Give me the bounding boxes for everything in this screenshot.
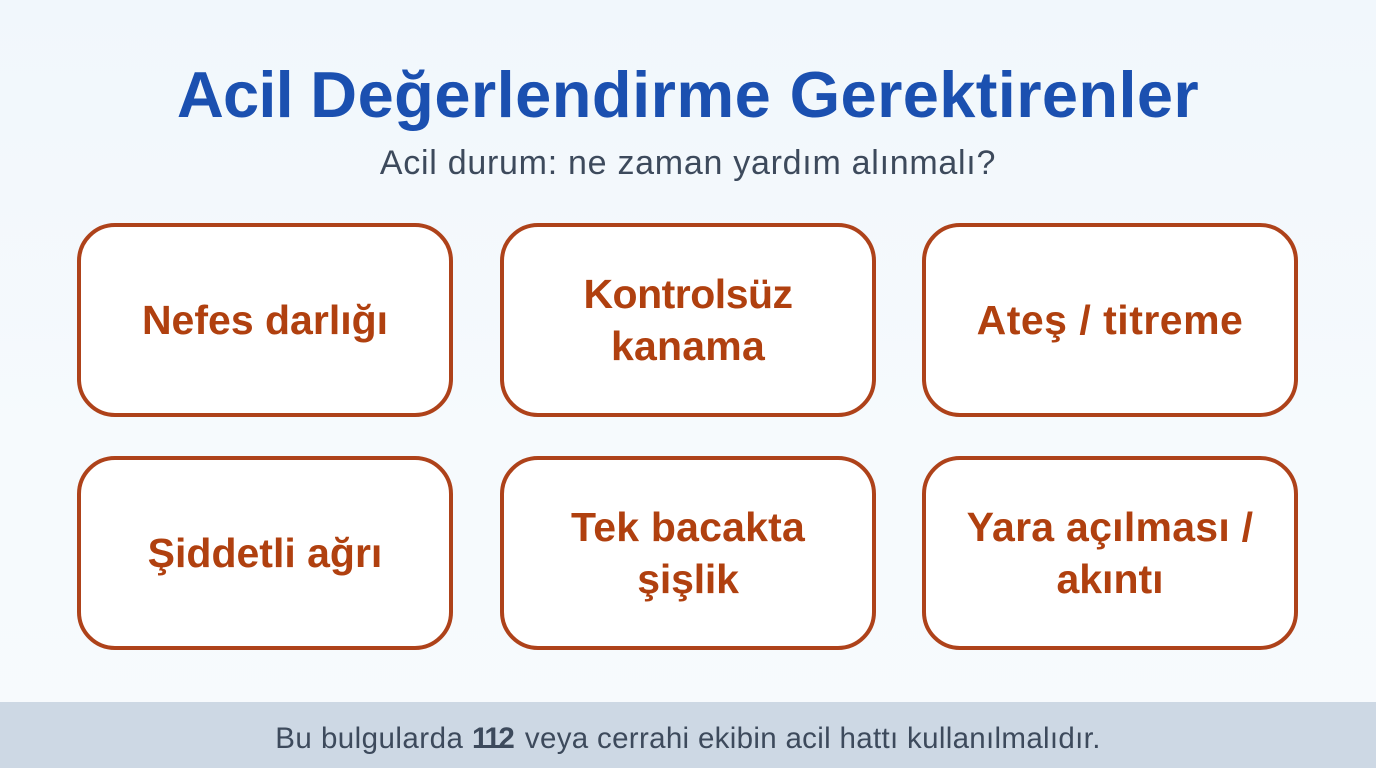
card: Kontrolsüz kanama: kanama xyxy=(611,323,765,369)
title: Acil Değerlendirme Gerektirenler xyxy=(177,58,1199,130)
card: Yara açılması / akıntı: akıntı xyxy=(1056,556,1164,602)
card: Şiddetli ağrı: Şiddetli ağrı xyxy=(148,530,382,576)
card: Kontrolsüz kanama xyxy=(500,223,876,417)
footer note xyxy=(0,702,1376,768)
card: Nefes darlığı xyxy=(77,223,453,417)
card: Nefes darlığı: Nefes darlığı xyxy=(142,297,388,343)
card: Yara açılması / akıntı xyxy=(922,456,1298,650)
card: Ateş / titreme: Ateş / titreme xyxy=(977,297,1243,343)
card: Tek bacakta şişlik xyxy=(500,456,876,650)
footer note: Bu bulgularda 112 veya cerrahi ekibin acil hattı kullanılmalıdır. xyxy=(275,722,1101,755)
card: Yara açılması / akıntı: Yara açılması / xyxy=(967,504,1253,550)
subtitle: Acil durum: ne zaman yardım alınmalı? xyxy=(380,144,996,182)
card: Ateş / titreme xyxy=(922,223,1298,417)
card: Şiddetli ağrı xyxy=(77,456,453,650)
card: Tek bacakta şişlik: şişlik xyxy=(637,556,739,602)
card: Tek bacakta şişlik: Tek bacakta xyxy=(571,504,805,550)
card: Kontrolsüz kanama: Kontrolsüz xyxy=(583,271,793,317)
